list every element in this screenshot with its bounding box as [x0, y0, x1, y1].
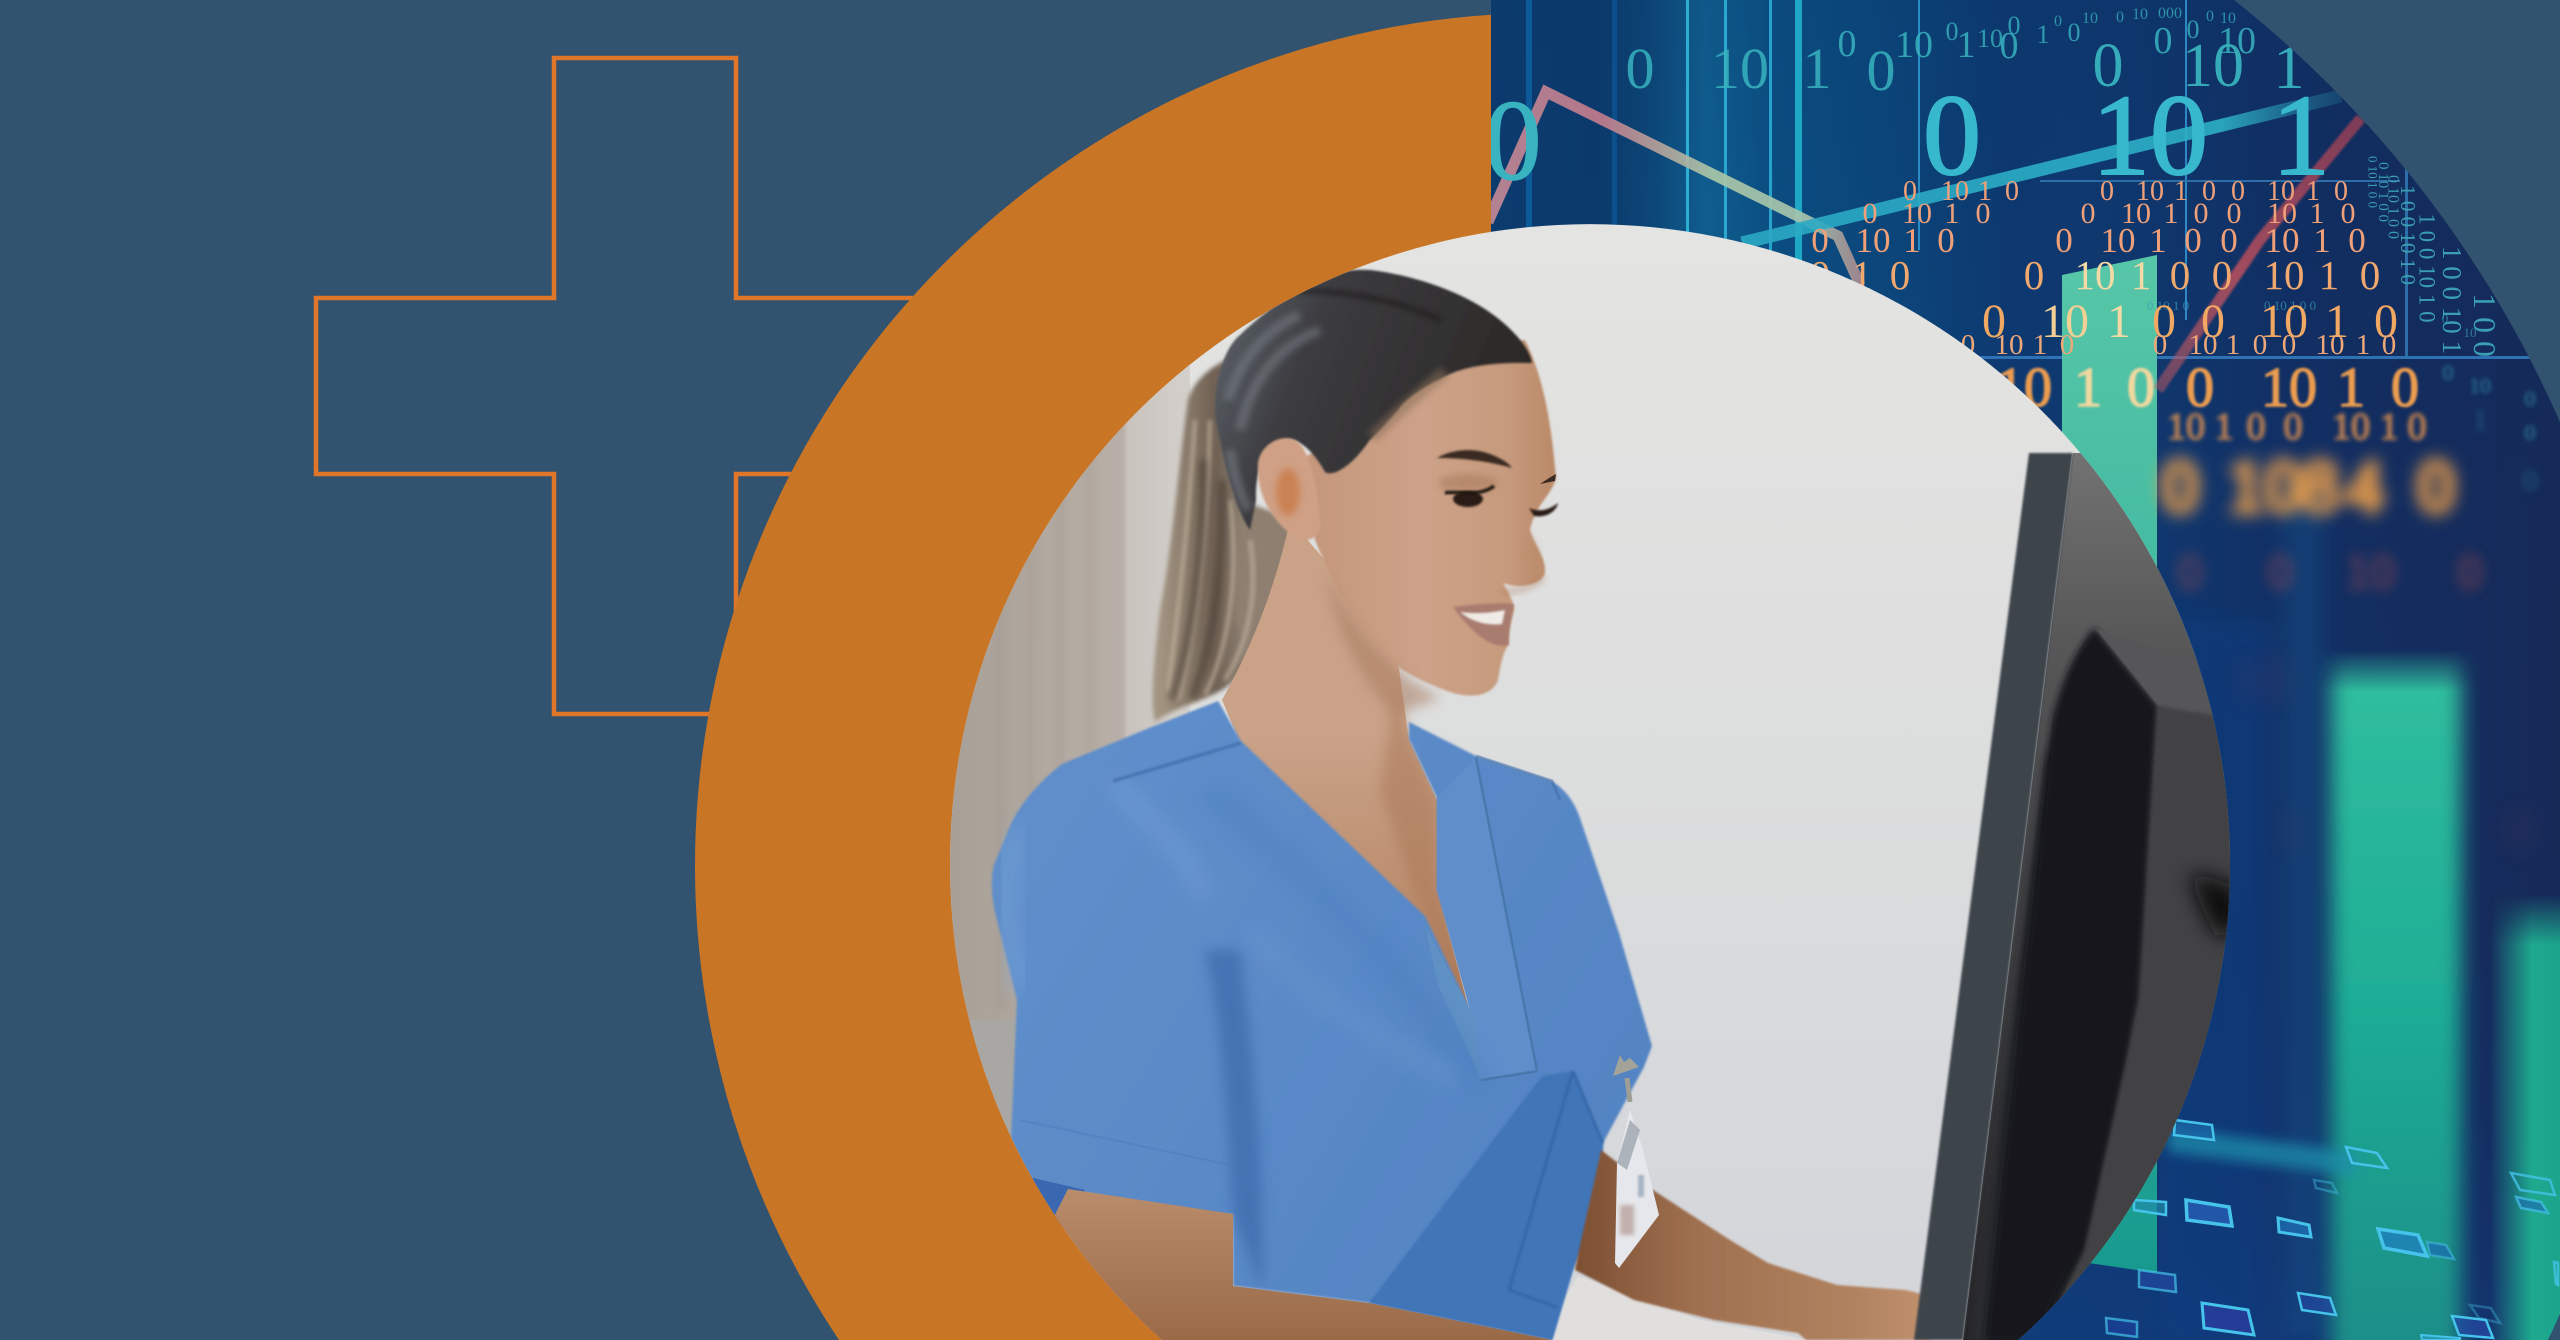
- chair: [969, 1020, 1018, 1150]
- neck and chest: [1222, 530, 1468, 1006]
- binary digits: rotated side columns: 10: [2469, 372, 2491, 398]
- pocket: [1509, 1071, 1603, 1307]
- binary digits: rotated side columns: 0 10 1 0 0: [2384, 175, 2402, 239]
- binary digits: orange rows: 0: [2153, 329, 2167, 361]
- facial features: [1437, 450, 1558, 646]
- binary digits: orange rows: 10: [2316, 329, 2344, 361]
- binary digits: orange rows: 10: [2264, 220, 2300, 260]
- binary digits: orange rows: 0: [2127, 357, 2155, 419]
- binary digits: teal rows: 0: [2116, 8, 2124, 26]
- binary digits: rotated side columns: 10: [2464, 324, 2476, 340]
- binary digits: orange rows: 10: [2267, 176, 2295, 206]
- light band: [2168, 1128, 2357, 1176]
- binary digits: orange rows: 0: [2170, 252, 2190, 298]
- monitor back shell: [1972, 632, 2130, 1340]
- binary digits: orange rows: 1: [2164, 196, 2178, 230]
- binary digits: teal rows: 0: [2206, 8, 2214, 24]
- binary digits: orange rows: 10: [2136, 176, 2164, 206]
- binary digits: orange rows: 1: [2325, 294, 2349, 348]
- binary digits: teal rows: 1: [2274, 34, 2304, 102]
- binary digits: orange rows: 10: [2345, 543, 2395, 599]
- binary digits: orange rows: 1: [2306, 176, 2320, 206]
- binary digits: orange rows: 0: [2178, 543, 2202, 599]
- binary digits: orange rows: 0: [2360, 252, 2380, 298]
- binary digits: orange rows: 1: [2149, 220, 2167, 260]
- binary digits: teal rows: 10: [2218, 20, 2256, 62]
- binary digits: orange rows: 10: [2332, 406, 2370, 448]
- binary digits: orange rows: 0: [2055, 220, 2073, 260]
- binary digits: orange rows: 1: [2337, 357, 2365, 419]
- binary digits: rotated side columns: 0 10 1 0: [2147, 298, 2189, 312]
- binary digits: orange rows: 0: [1937, 220, 1955, 260]
- binary digits: orange rows: 1: [2226, 329, 2240, 361]
- binary digits: orange rows: 0: [2408, 406, 2426, 448]
- binary digits: teal rows: [1491, 8, 2324, 181]
- id badge: [1615, 1110, 1659, 1268]
- binary digits: rotated side columns: 0 10 1 0 0: [2366, 156, 2380, 208]
- binary digits: teal rows: 0: [1838, 23, 1856, 65]
- binary digits: teal rows: 0: [1923, 72, 1981, 200]
- ear: [1258, 438, 1320, 540]
- binary digits: orange rows: 10: [2100, 220, 2136, 260]
- binary digits: orange rows: 1: [1852, 252, 1872, 298]
- binary digits: orange rows: 1: [1978, 176, 1992, 206]
- binary digits: teal rows: 1: [2036, 20, 2050, 48]
- binary digits: teal rows: 0: [1866, 38, 1896, 102]
- binary digits: orange rows: 0: [2212, 252, 2232, 298]
- binary digits: orange rows: 0: [2334, 176, 2348, 206]
- binary digits: teal rows: 0: [2092, 32, 2124, 100]
- binary digits: orange rows: 0: [1810, 252, 1830, 298]
- dark under-sleeve: [1029, 1177, 1085, 1227]
- binary digits: rotated side columns: 0: [2524, 386, 2536, 410]
- binary digits: orange rows: 0: [2080, 196, 2096, 230]
- binary digits: teal rows: 10: [1977, 24, 2003, 52]
- binary digits: orange rows: 10: [1996, 357, 2052, 419]
- sleeve seam and fold: [1205, 950, 1263, 1290]
- binary digits: orange rows: 108: [2228, 446, 2338, 528]
- binary digits: orange rows: 10: [2121, 196, 2151, 230]
- binary digits: teal rows: 10: [2092, 72, 2208, 200]
- binary digits: teal rows: 10: [2220, 10, 2236, 26]
- binary digits: rotated side columns: 1: [2472, 404, 2488, 436]
- jaw shadow: [1330, 591, 1441, 718]
- binary digits: orange rows: 0: [2505, 797, 2535, 863]
- binary digits: orange rows: 1: [1944, 196, 1960, 230]
- binary digits: orange rows: 0: [1961, 329, 1975, 361]
- binary digits: orange rows: 0: [1976, 196, 1990, 230]
- line chart: red trend line: [2158, 118, 2361, 390]
- orange circle: [695, 13, 2401, 1340]
- binary digits: orange rows: 1: [2174, 176, 2188, 206]
- binary digits: rotated side columns: 1 0 0 10 1 0: [2396, 185, 2420, 285]
- binary digits: rotated side columns: 0 10 1 0 0: [2264, 298, 2316, 312]
- binary digits: orange rows: 0: [2340, 196, 2356, 230]
- binary digits: teal rows: 0: [1946, 16, 1958, 46]
- binary digits: orange rows: 0: [2284, 406, 2302, 448]
- binary digits: orange rows: 1: [2380, 406, 2398, 448]
- binary digits: orange rows: 0: [2246, 406, 2266, 448]
- binary digits: orange rows: 10: [2267, 196, 2297, 230]
- line chart: pink trend line: [1488, 92, 1860, 285]
- binary digits: orange rows: 1: [2074, 357, 2102, 419]
- binary digits: orange rows: 0: [2348, 220, 2366, 260]
- front dark panel: [1369, 1071, 1603, 1340]
- binary digits: rotated side columns: 1 0 0 10 1 0: [2414, 213, 2440, 323]
- binary digits: teal rows: 0: [2008, 10, 2020, 40]
- ponytail: [1153, 360, 1310, 722]
- binary digits: orange rows: 0: [1811, 220, 1829, 260]
- binary digits: teal rows: 10: [2082, 10, 2098, 26]
- binary digits: teal rows: 10: [2182, 32, 2244, 100]
- binary digits: orange rows: 10: [1994, 329, 2024, 361]
- binary digits: orange rows: 0: [2194, 196, 2208, 230]
- binary digits: orange rows: 1: [2319, 252, 2339, 298]
- binary digits: teal rows: 1: [1956, 24, 1976, 66]
- binary digits: orange rows: 10: [1941, 176, 1969, 206]
- binary digits: orange rows: 0: [1890, 252, 1910, 298]
- binary digits: orange rows: 0: [2374, 294, 2398, 348]
- binary digits: orange rows: 1: [2313, 220, 2331, 260]
- binary digits: orange rows: 1: [2356, 329, 2370, 361]
- badge clip: [1613, 1055, 1639, 1102]
- binary digits: orange rows: 1: [2275, 797, 2305, 863]
- binary digits: orange rows: 0: [2186, 357, 2214, 419]
- binary digits: orange rows: 0: [2100, 176, 2114, 206]
- binary digits: orange rows: 0: [2226, 196, 2242, 230]
- undershirt: [1425, 925, 1481, 1080]
- binary digits: orange rows: 0: [2024, 252, 2044, 298]
- binary digits: rotated side columns: 0 10 1 0 0: [2375, 162, 2391, 222]
- binary digits: orange rows: 0: [2152, 294, 2176, 348]
- monitor bezel: [1914, 453, 2073, 1340]
- binary digits: teal rows: 10: [1895, 24, 1933, 66]
- binary digits: orange rows: 0: [2253, 329, 2267, 361]
- binary digits: teal rows: 1: [1802, 36, 1832, 100]
- placket: [1437, 797, 1536, 1077]
- binary digits: orange rows: 0: [1903, 176, 1917, 206]
- binary digits: rotated side columns: 0: [2522, 464, 2538, 496]
- right arm and hand: [1575, 1150, 1930, 1340]
- curtain: [950, 364, 1190, 1024]
- neck shadow: [1379, 706, 1466, 998]
- panel: data visual backdrop: [1484, 0, 2560, 1340]
- binary digits: teal rows: 000: [2158, 4, 2182, 22]
- binary digits: orange rows: 10: [2261, 357, 2317, 419]
- floating data tiles: [2106, 1120, 2558, 1340]
- binary digits: orange rows: 1: [2107, 294, 2131, 348]
- binary digits: orange rows: 0: [2005, 176, 2019, 206]
- binary digits: orange rows: 10: [2188, 329, 2218, 361]
- line chart: teal trend line: [1742, 96, 2341, 243]
- binary digits: orange rows: 10: [2041, 294, 2089, 348]
- binary digits: teal rows: 0: [2068, 18, 2080, 46]
- binary digits: orange rows: 10: [2264, 252, 2304, 298]
- binary digits: orange rows: 0: [2382, 329, 2396, 361]
- face: [1300, 340, 1556, 696]
- binary digits: orange rows: 0: [2268, 543, 2292, 599]
- monitor: [1914, 453, 2240, 1340]
- icon: medical cross outline: [316, 58, 974, 714]
- binary digits: orange rows: 0: [2202, 176, 2216, 206]
- second hand: [1980, 1326, 2036, 1340]
- binary digits: teal rows: 0: [2054, 12, 2062, 30]
- binary digits: orange rows: 10: [2230, 647, 2290, 713]
- binary digits: teal rows: 10: [2132, 6, 2148, 22]
- binary digits: orange rows: 0: [2060, 329, 2074, 361]
- binary digits: orange rows: 10: [2167, 406, 2205, 448]
- bar chart: green bars: [2062, 255, 2560, 1340]
- binary digits: rotated side columns: 0: [2524, 420, 2536, 444]
- binary digits: orange rows: 1: [2310, 196, 2324, 230]
- binary digits: orange rows: 1: [2131, 252, 2151, 298]
- binary digits: orange rows: 0: [1862, 196, 1878, 230]
- binary digits: teal rows: 0: [2186, 14, 2200, 44]
- binary digits: teal rows: 0: [2154, 20, 2172, 62]
- desk: [1540, 1276, 1810, 1340]
- wall: [950, 224, 2230, 1340]
- hair: [1215, 270, 1532, 530]
- binary digits: orange rows: 0: [2220, 220, 2238, 260]
- binary digits: rotated side columns: 0: [2442, 360, 2454, 384]
- binary digits: orange rows: [1810, 176, 2535, 863]
- binary digits: orange rows: 4: [2346, 446, 2382, 528]
- binary digits: orange rows: 0: [2184, 220, 2202, 260]
- photo: nurse at computer: [950, 224, 2240, 1340]
- vertical grid lines: [1526, 0, 2560, 359]
- scrub shirt: [992, 701, 1652, 1340]
- left arm: [1040, 1189, 1552, 1340]
- binary digits: rotated side columns: 1 0 0 10 1: [2437, 246, 2467, 354]
- binary digits: orange rows: 0: [2418, 446, 2454, 528]
- binary digits: teal rows: 0: [1626, 36, 1654, 100]
- binary digits: rotated side columns: 0: [2442, 310, 2448, 326]
- binary digits: orange rows: 1: [2033, 329, 2047, 361]
- binary digits: teal rows: 10: [1711, 36, 1769, 100]
- binary digits: orange rows: 0: [2282, 329, 2296, 361]
- binary digits: teal rows: 0: [1484, 76, 1542, 204]
- binary digits: orange rows: 10: [2260, 294, 2308, 348]
- binary digits: orange rows: 0: [2162, 446, 2198, 528]
- binary digits: teal rows: 0: [2000, 25, 2018, 67]
- binary digits: orange rows: 0: [1982, 294, 2006, 348]
- binary digits: orange rows: 1: [1903, 220, 1921, 260]
- binary digits: rotated side columns: 1 0 0: [2467, 293, 2503, 357]
- binary digits: orange rows: 0: [2201, 294, 2225, 348]
- binary digits: orange rows: 10: [2074, 252, 2116, 298]
- column glow: [2176, 509, 2322, 1334]
- binary digits: orange rows: 1: [2214, 406, 2234, 448]
- binary digits: orange rows: 0: [2458, 543, 2482, 599]
- binary digits: orange rows: 0: [2231, 176, 2245, 206]
- binary digits: rotated side columns: [2147, 156, 2538, 496]
- binary digits: teal rows: 1: [2272, 72, 2330, 200]
- binary digits: orange rows: 0: [2391, 357, 2419, 419]
- binary digits: orange rows: 10: [1902, 196, 1932, 230]
- binary digits: orange rows: 10: [1856, 220, 1890, 260]
